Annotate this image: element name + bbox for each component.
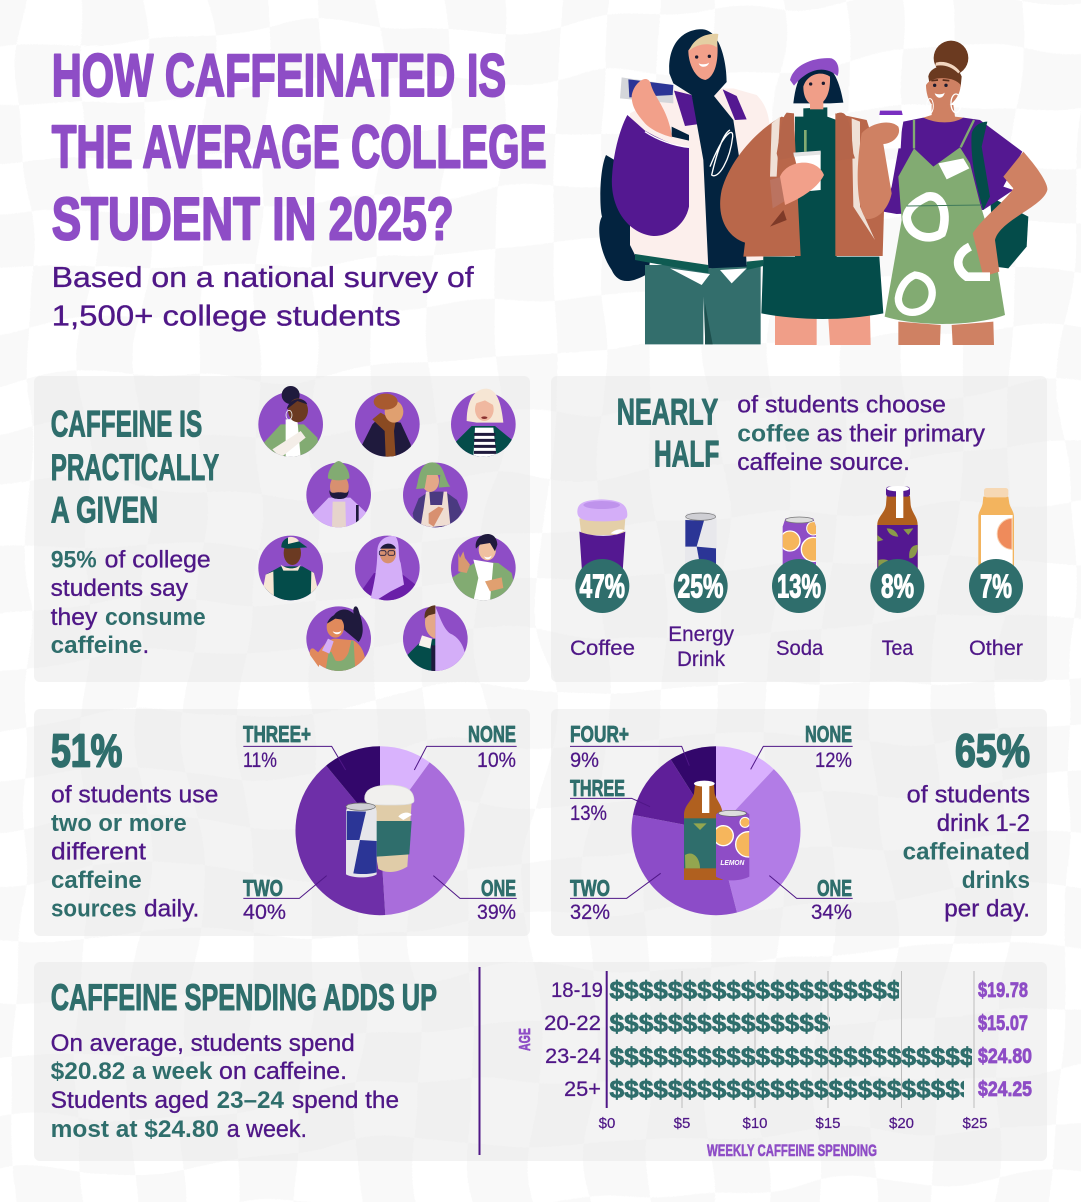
heading: nearly half: HALF (654, 434, 719, 475)
pie labels: 39% (477, 901, 516, 924)
avatar 7 (355, 536, 420, 601)
avatar 3 (451, 389, 516, 458)
text: coffee as primary source: coffee (737, 421, 810, 448)
row: 20-22: 20-22 (544, 1012, 601, 1035)
pie labels: 11% (243, 749, 277, 772)
pie labels: 12% (815, 749, 852, 772)
drink names: Energy (668, 623, 734, 646)
drink names: Drink (677, 648, 725, 671)
stat: 51 percent: 51% (51, 725, 122, 777)
icon: other bottle (978, 488, 1014, 570)
subtitle: 1,500+ college students (52, 301, 401, 333)
avatars: ten students (258, 386, 516, 672)
text: two or more sources: caffeine (51, 867, 142, 894)
text: two or more sources: daily. (144, 896, 199, 923)
drink names: Soda (776, 637, 824, 660)
row: 23-24: $$$$$$$$$$$$$$$$$$$$$$$$$ (610, 1043, 975, 1071)
pie labels: 13% (570, 802, 607, 825)
badge labels: 25% (678, 568, 724, 604)
text: one to two drinks per day: caffeinated (903, 838, 1030, 865)
heading: nearly half (617, 391, 719, 475)
icons: coffee cup and energy can (346, 785, 414, 877)
text: coffee as primary source: as their primary (817, 421, 985, 448)
text: 95 percent of college students: students say (51, 575, 188, 602)
pie labels: THREE (570, 775, 625, 801)
text: coffee as primary source (737, 392, 985, 476)
text: 95 percent of college students: 95% (51, 547, 97, 574)
text: average spending: most at $24.80 (51, 1116, 219, 1143)
text: 95 percent of college students: . (142, 632, 149, 659)
text: two or more sources: sources (51, 896, 137, 923)
pie labels: FOUR+ (570, 721, 629, 747)
pie labels: 10% (477, 749, 516, 772)
row: 23-24 (546, 1046, 1032, 1068)
text: average spending: $20.82 a week (51, 1058, 213, 1085)
axis tick labels (599, 1115, 988, 1132)
drinks illustrations (575, 486, 1023, 613)
avatar 1 (258, 386, 323, 458)
text: average spending: Students aged (51, 1087, 209, 1114)
title: THE AVERAGE COLLEGE (52, 114, 547, 181)
pie chart: drinks per day (632, 746, 800, 915)
pie labels: THREE+ (243, 721, 311, 747)
heading: nearly half: NEARLY (617, 391, 718, 432)
stat: 65 percent: 65% (955, 725, 1030, 777)
chart: weekly spending by age (517, 971, 1032, 1160)
avatar 4 (306, 461, 371, 528)
panel: caffeine spending (34, 962, 1047, 1161)
row: 23-24: $24.80 (978, 1045, 1032, 1068)
person: right student in green dress (883, 41, 1047, 345)
badge labels: 7% (980, 568, 1012, 604)
pie labels: ONE (481, 875, 516, 901)
row: 18-19: 18-19 (551, 979, 603, 1002)
title: STUDENT IN 2025? (52, 186, 454, 252)
badges: percentages (575, 559, 1023, 613)
pie labels (570, 721, 852, 924)
takeaway cup held up (879, 115, 903, 148)
pie labels: TWO (243, 875, 283, 901)
heading: A GIVEN (51, 490, 158, 531)
icon: coffee cup (577, 499, 627, 572)
illustration: three students (599, 29, 1047, 345)
leader lines (570, 746, 853, 898)
badge labels (580, 568, 1012, 604)
panel: primary caffeine source (551, 376, 1047, 682)
heading: CAFFEINE IS (51, 404, 202, 445)
pie labels (243, 721, 516, 924)
title (52, 42, 547, 252)
pie labels: 40% (243, 901, 286, 924)
title: HOW CAFFEINATED IS (52, 42, 506, 109)
text: average spending: spend the (292, 1087, 399, 1114)
text: two or more sources: of students use (51, 782, 218, 809)
text: 95 percent of college students: consume (105, 604, 206, 631)
text: two or more sources: two or more (51, 810, 187, 837)
avatar 9 (306, 606, 371, 672)
pie labels: 9% (570, 749, 599, 772)
person: middle student with iced coffee (720, 58, 903, 345)
subtitle: Based on a national survey of (52, 262, 475, 294)
avatar 10 (403, 605, 468, 672)
badge labels: 47% (580, 568, 625, 604)
axis tick labels: $10 (742, 1115, 768, 1132)
row: 18-19 (552, 980, 1028, 1001)
drink names (570, 623, 1023, 671)
icon: soda can (782, 516, 816, 565)
text: average spending: a week. (227, 1116, 307, 1143)
pie labels: ONE (817, 875, 852, 901)
row: 20-22: $15.07 (978, 1012, 1028, 1035)
text: one to two drinks per day (903, 782, 1030, 923)
drink names: Coffee (570, 637, 635, 660)
text: average spending: On average, students spend (51, 1030, 355, 1057)
panel: drinks per day (551, 709, 1047, 936)
icons: tea bottle and soda can: LEMON (720, 858, 745, 867)
text: one to two drinks per day: drink 1-2 (937, 810, 1030, 837)
heading: CAFFEINE SPENDING ADDS UP (51, 977, 437, 1018)
text: 95 percent of college students (51, 547, 211, 659)
text: coffee as primary source: caffeine source. (737, 449, 910, 476)
text: two or more sources: different (51, 838, 146, 865)
text: one to two drinks per day: of students (907, 782, 1030, 809)
icons: tea bottle and soda can (684, 780, 750, 880)
avatar 6 (258, 536, 323, 601)
icon: tea bottle (877, 486, 918, 570)
axis tick labels: $0 (599, 1115, 615, 1132)
pie labels: NONE (468, 721, 516, 747)
text: 95 percent of college students: caffeine (51, 632, 142, 659)
avatar 2 (355, 392, 420, 458)
text: 95 percent of college students: they (51, 604, 97, 631)
row: 25+: $$$$$$$$$$$$$$$$$$$$$$$$$ (610, 1076, 975, 1104)
person: left student with energy drink (599, 29, 769, 344)
drink names: Tea (882, 637, 914, 660)
axis tick labels: $20 (889, 1115, 914, 1132)
row: 18-19: $19.78 (978, 979, 1028, 1002)
row: 20-22: $$$$$$$$$$$$$$$$$$$$$$$$$ (610, 1010, 975, 1038)
axis title: weekly caffeine spending: WEEKLY CAFFEINE SPENDING (707, 1141, 877, 1160)
avatar 5 (403, 462, 468, 528)
icon: energy drink can (685, 512, 717, 567)
drink names: Other (969, 637, 1023, 660)
leader lines (243, 746, 517, 898)
row: 25+ (564, 1078, 1032, 1100)
pie labels: 32% (570, 901, 610, 924)
text: one to two drinks per day: per day. (944, 896, 1030, 923)
axis title: age: AGE (517, 1028, 534, 1051)
subtitle (52, 262, 475, 333)
heading: PRACTICALLY (51, 447, 219, 488)
badge labels: 13% (777, 568, 821, 604)
text: two or more sources (51, 782, 218, 923)
text: one to two drinks per day: drinks (962, 867, 1030, 894)
text: average spending (51, 1030, 399, 1143)
pie labels: NONE (805, 721, 852, 747)
panel: caffeine is a given (34, 376, 530, 682)
panel: daily caffeine sources (34, 709, 530, 936)
text: average spending: 23–24 (217, 1087, 285, 1114)
heading (51, 404, 219, 531)
axis tick labels: $15 (815, 1115, 841, 1132)
pie labels: TWO (570, 875, 610, 901)
avatar 8 (451, 534, 516, 601)
row: 25+: 25+ (564, 1078, 601, 1101)
row: 18-19: $$$$$$$$$$$$$$$$$$$$$$$$$ (610, 976, 975, 1004)
text: 95 percent of college students: of college (105, 547, 211, 574)
row: 23-24: 23-24 (545, 1045, 601, 1068)
text: average spending: on caffeine. (219, 1058, 347, 1085)
row: 20-22 (545, 1012, 1028, 1034)
axis tick labels: $25 (962, 1115, 988, 1132)
text: coffee as primary source: of students choose (737, 392, 946, 418)
axis tick labels: $5 (674, 1115, 690, 1132)
pie chart: sources used (295, 746, 464, 915)
pie labels: 34% (811, 901, 852, 924)
row: 25+: $24.25 (978, 1078, 1032, 1101)
badge labels: 8% (881, 568, 914, 604)
